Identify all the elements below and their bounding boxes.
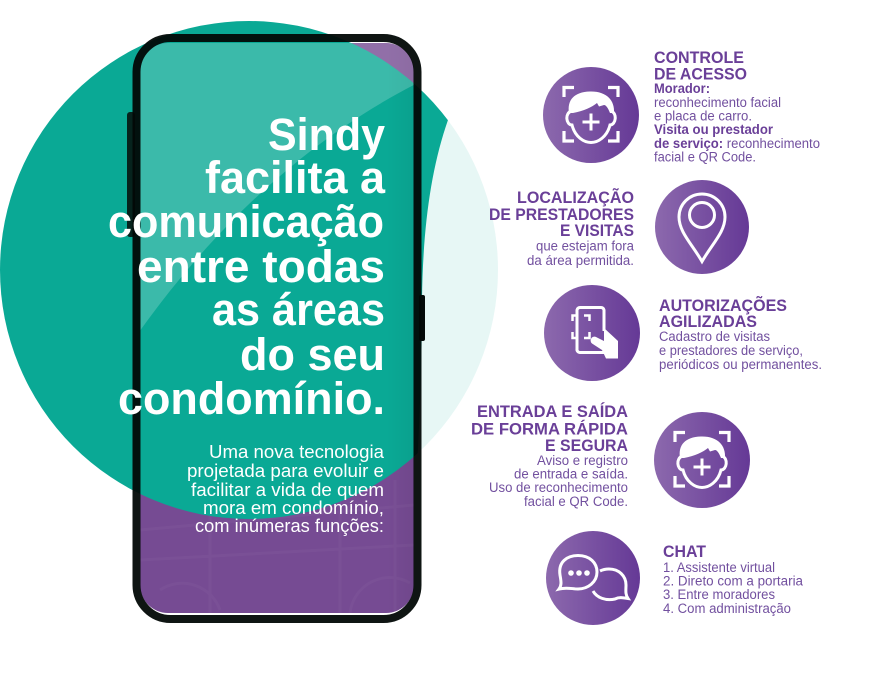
text: controle de acesso: Morador: <box>654 81 710 96</box>
subtitle: mora em condomínio, <box>203 497 384 518</box>
text: controle de acesso: reconhecimento facial <box>654 95 781 110</box>
text: chat <box>663 543 803 616</box>
text: chat: 3. Entre moradores <box>663 587 775 602</box>
pale overlay shape <box>414 95 510 525</box>
text: localização: LOCALIZAÇÃO <box>517 187 634 207</box>
icon: location pin <box>655 180 749 274</box>
text: controle de acesso: CONTROLE <box>654 49 744 67</box>
icon: chat bubbles <box>546 531 640 625</box>
text: entrada e saída: Uso de reconhecimento <box>489 480 628 495</box>
text: localização: DE PRESTADORES <box>489 206 634 224</box>
text: chat: CHAT <box>663 543 706 561</box>
title: condomínio. <box>118 373 385 424</box>
text: controle de acesso <box>654 49 820 164</box>
subtitle: com inúmeras funções: <box>195 515 384 536</box>
text: autorizações: AGILIZADAS <box>659 313 757 331</box>
subtitle: Uma nova tecnologia <box>209 441 385 462</box>
title: do seu <box>240 329 385 380</box>
text: entrada e saída: de entrada e saída. <box>514 466 628 482</box>
title: facilita a <box>205 152 386 203</box>
text: entrada e saída: DE FORMA RÁPIDA <box>471 420 628 438</box>
text: chat: 4. Com administração <box>663 601 791 616</box>
text: controle de acesso: Visita ou prestador <box>654 122 774 137</box>
phone <box>132 34 422 623</box>
title: comunicação <box>108 196 384 247</box>
text: entrada e saída: ENTRADA E SAÍDA <box>477 402 628 421</box>
text: entrada e saída <box>471 402 628 509</box>
text: autorizações <box>659 295 822 372</box>
text: localização: E VISITAS <box>560 222 634 240</box>
subtitle <box>187 441 385 536</box>
title: entre todas <box>137 241 385 292</box>
text: entrada e saída: facial e QR Code. <box>524 494 628 509</box>
icon: phone side button left <box>127 112 135 237</box>
title: as áreas <box>212 284 385 335</box>
text: chat: 1. Assistente virtual <box>663 560 775 575</box>
title: Sindy <box>268 109 385 160</box>
text: autorizações: e prestadores de serviço, <box>659 343 803 358</box>
text: localização: que estejam fora <box>536 238 634 254</box>
text: localização <box>489 187 634 268</box>
icon: face recognition <box>543 67 639 163</box>
text: autorizações: periódicos ou permanentes. <box>659 357 822 372</box>
text: controle de acesso: de serviço: reconhecimento <box>654 136 820 151</box>
subtitle: facilitar a vida de quem <box>191 479 384 500</box>
icon: face recognition 2 <box>654 412 750 508</box>
text: controle de acesso: facial e QR Code. <box>654 150 756 164</box>
phone frame <box>136 38 418 619</box>
text: entrada e saída: E SEGURA <box>545 437 628 455</box>
text: chat: 2. Direto com a portaria <box>663 574 803 588</box>
icon: phone with hand <box>544 285 640 381</box>
title <box>108 109 386 424</box>
icon: phone side button right <box>419 295 425 341</box>
text: controle de acesso: e placa de carro. <box>654 108 752 124</box>
text: controle de acesso: DE ACESSO <box>654 66 747 84</box>
text: autorizações: Cadastro de visitas <box>659 329 770 344</box>
subtitle: projetada para evoluir e <box>187 460 384 481</box>
text: entrada e saída: Aviso e registro <box>537 453 628 468</box>
text: autorizações: AUTORIZAÇÕES <box>659 295 787 315</box>
green background circle <box>0 21 498 519</box>
text: localização: da área permitida. <box>527 253 634 268</box>
phone screen <box>140 43 414 613</box>
